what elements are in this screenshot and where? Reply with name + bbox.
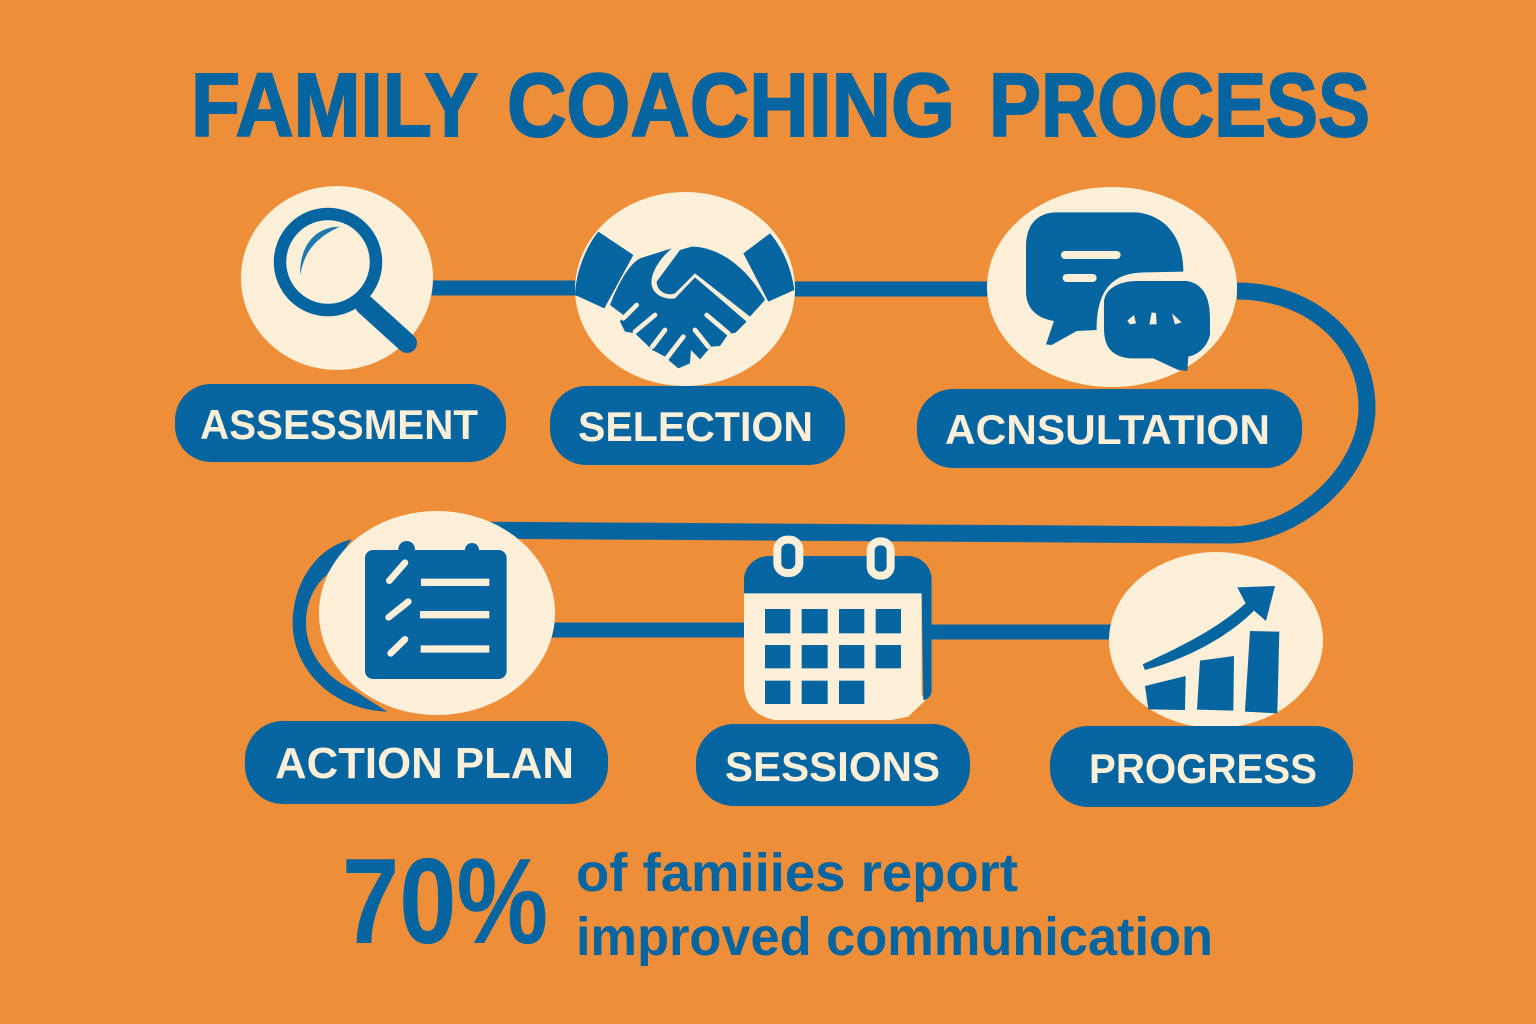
stat caption — [576, 843, 1213, 967]
label: assessment — [175, 384, 506, 462]
step: consultation — [917, 187, 1302, 468]
icon: magnifying glass — [241, 186, 433, 370]
label: sessions: SESSIONS — [725, 743, 940, 790]
stat number: 70% — [342, 833, 548, 969]
step: progress — [1050, 552, 1353, 807]
title: PROCESS — [989, 56, 1370, 156]
icon: checklist — [319, 511, 555, 715]
label: selection: SELECTION — [578, 403, 813, 450]
icon: calendar — [744, 540, 932, 720]
step: action plan — [245, 511, 608, 804]
label: consultation — [917, 389, 1302, 468]
step: sessions — [696, 540, 970, 806]
label: assessment: ASSESSMENT — [200, 401, 478, 448]
connector path — [293, 288, 1367, 712]
label: consultation: ACNSULTATION — [945, 406, 1270, 453]
label: sessions — [696, 724, 970, 806]
title — [191, 56, 1370, 156]
label: progress: PROGRESS — [1089, 745, 1317, 792]
icon: growth chart — [1109, 552, 1323, 728]
label: selection — [550, 386, 845, 465]
stat caption: of famiiies report — [576, 843, 1018, 903]
step: selection — [550, 192, 845, 465]
label: action plan: ACTION PLAN — [275, 739, 574, 788]
step: assessment — [175, 186, 506, 462]
label: progress — [1050, 726, 1353, 807]
label: action plan — [245, 721, 608, 804]
icon: handshake — [575, 192, 795, 386]
title: COACHING — [507, 56, 955, 156]
title: FAMILY — [191, 56, 478, 156]
icon: speech bubbles — [987, 187, 1237, 387]
statistic — [342, 833, 1213, 969]
stat caption: improved communication — [576, 907, 1213, 967]
